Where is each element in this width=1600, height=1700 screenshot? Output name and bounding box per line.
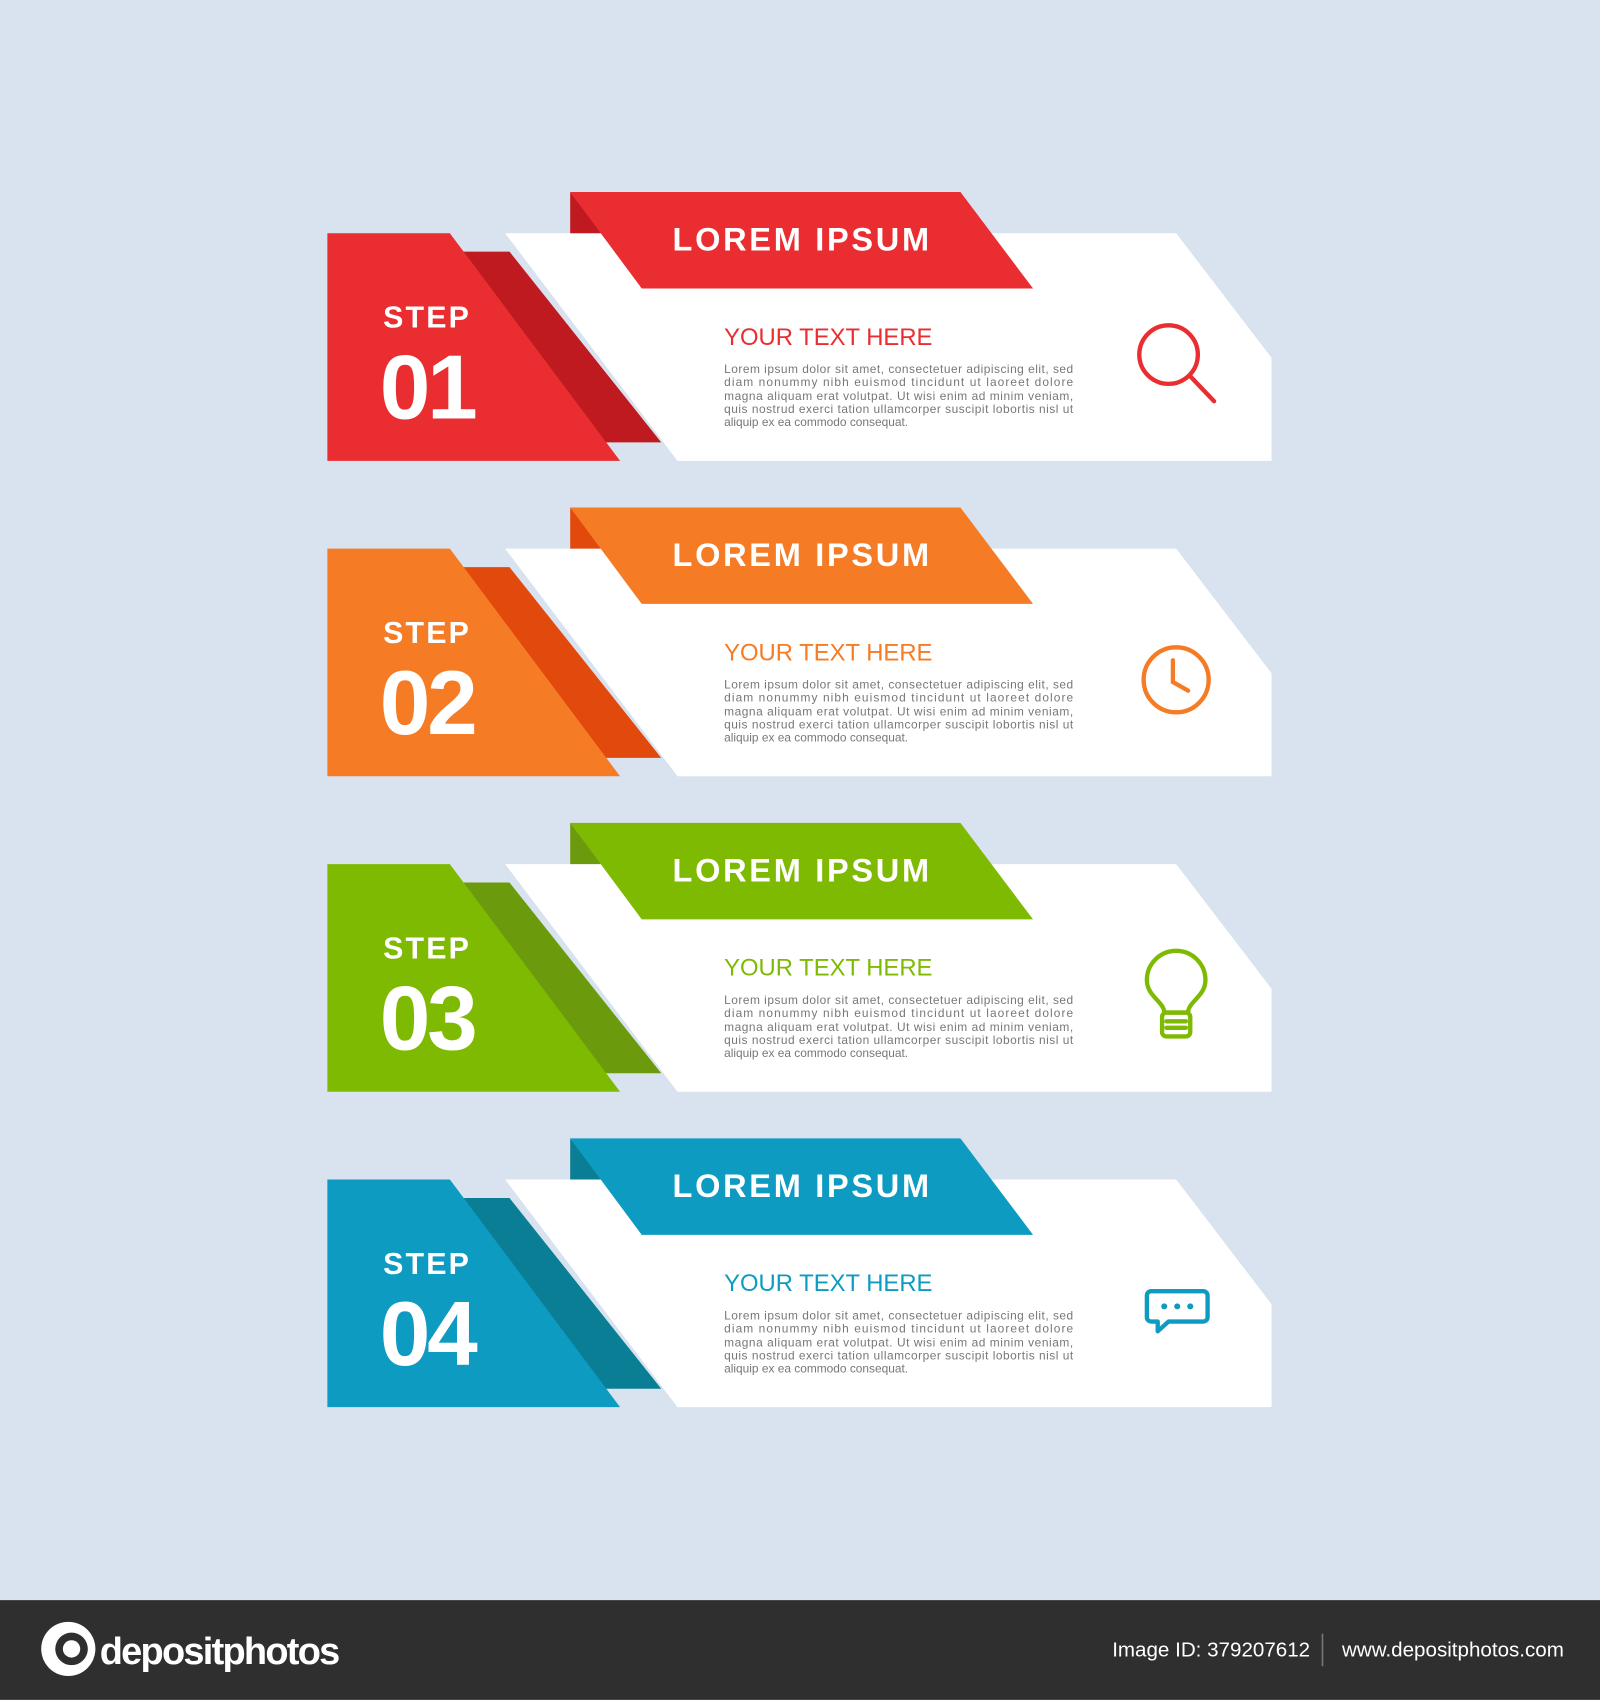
- dark fold strip: [450, 1198, 661, 1389]
- body text: aliquip ex ea commodo consequat.: [724, 1046, 908, 1060]
- body text: diam nonummy nibh euismod tincidunt ut laoreet dolore: [724, 690, 1074, 704]
- step block: [327, 233, 620, 461]
- body text: Lorem ipsum dolor sit amet, consectetuer adipiscing elit, sed: [724, 1308, 1073, 1322]
- header ribbon: [570, 823, 1033, 919]
- body text: aliquip ex ea commodo consequat.: [724, 1361, 908, 1375]
- body text: diam nonummy nibh euismod tincidunt ut laoreet dolore: [724, 1006, 1074, 1020]
- body text: [724, 362, 1074, 429]
- dark fold strip: [450, 252, 661, 442]
- subtitle: YOUR TEXT HERE: [724, 639, 932, 666]
- body text: magna aliquam erat volutpat. Ut wisi enim ad minim veniam,: [724, 389, 1073, 403]
- logo text: depositphotos: [100, 1631, 339, 1673]
- body text: quis nostrud exerci tation ullamcorper suscipit lobortis nisl ut: [724, 1348, 1074, 1362]
- icon: clock: [1144, 647, 1209, 712]
- header ribbon fold: [570, 507, 602, 549]
- header text: LOREM IPSUM: [673, 222, 932, 258]
- subtitle: YOUR TEXT HERE: [724, 1270, 932, 1297]
- header ribbon: [570, 1138, 1033, 1235]
- step block: [327, 549, 620, 776]
- body text: quis nostrud exerci tation ullamcorper suscipit lobortis nisl ut: [724, 402, 1074, 416]
- step 3 panel: [327, 823, 1272, 1092]
- body text: Lorem ipsum dolor sit amet, consectetuer adipiscing elit, sed: [724, 362, 1073, 376]
- header text: LOREM IPSUM: [673, 1168, 932, 1204]
- header ribbon fold: [570, 1138, 602, 1180]
- body text: aliquip ex ea commodo consequat.: [724, 415, 908, 429]
- body text: magna aliquam erat volutpat. Ut wisi enim ad minim veniam,: [724, 1335, 1073, 1349]
- step label: STEP: [383, 1248, 471, 1281]
- image id: Image ID: 379207612: [1112, 1639, 1310, 1662]
- subtitle: YOUR TEXT HERE: [724, 955, 932, 982]
- step label: STEP: [383, 302, 471, 335]
- subtitle: YOUR TEXT HERE: [724, 324, 932, 351]
- body text: Lorem ipsum dolor sit amet, consectetuer adipiscing elit, sed: [724, 993, 1073, 1007]
- step number: 04: [380, 1284, 478, 1385]
- header ribbon fold: [570, 823, 602, 864]
- white content panel: [505, 233, 1272, 461]
- white content panel: [505, 549, 1272, 776]
- step 2 panel: [327, 507, 1272, 776]
- step block: [327, 864, 620, 1092]
- step label: STEP: [383, 932, 471, 965]
- body text: magna aliquam erat volutpat. Ut wisi enim ad minim veniam,: [724, 705, 1073, 719]
- white content panel: [505, 1180, 1272, 1407]
- dark fold strip: [450, 567, 661, 758]
- body text: Lorem ipsum dolor sit amet, consectetuer adipiscing elit, sed: [724, 677, 1073, 691]
- body text: quis nostrud exerci tation ullamcorper suscipit lobortis nisl ut: [724, 1033, 1074, 1047]
- header text: LOREM IPSUM: [673, 537, 932, 573]
- body text: diam nonummy nibh euismod tincidunt ut laoreet dolore: [724, 375, 1074, 389]
- step 4 panel: [327, 1138, 1272, 1407]
- body text: magna aliquam erat volutpat. Ut wisi enim ad minim veniam,: [724, 1020, 1073, 1034]
- white content panel: [505, 864, 1272, 1092]
- header ribbon: [570, 192, 1033, 288]
- icon: chat bubble: [1147, 1291, 1208, 1331]
- icon: magnifier: [1139, 325, 1214, 401]
- footer bar: [0, 1600, 1600, 1700]
- header ribbon: [570, 507, 1033, 604]
- website: www.depositphotos.com: [1341, 1639, 1564, 1662]
- icon: light bulb: [1147, 951, 1205, 1036]
- body text: aliquip ex ea commodo consequat.: [724, 731, 908, 745]
- body text: quis nostrud exerci tation ullamcorper suscipit lobortis nisl ut: [724, 718, 1074, 732]
- step 1 panel: [327, 192, 1272, 461]
- step number: 03: [380, 968, 475, 1069]
- body text: [724, 993, 1074, 1060]
- header text: LOREM IPSUM: [673, 852, 932, 888]
- body text: [724, 1308, 1074, 1375]
- dark fold strip: [450, 883, 661, 1073]
- body text: [724, 677, 1074, 745]
- body text: diam nonummy nibh euismod tincidunt ut laoreet dolore: [724, 1321, 1074, 1335]
- step number: 02: [380, 653, 474, 754]
- step block: [327, 1180, 620, 1407]
- step number: 01: [380, 338, 476, 439]
- header ribbon fold: [570, 192, 602, 233]
- logo icon: [41, 1622, 95, 1676]
- step label: STEP: [383, 617, 471, 650]
